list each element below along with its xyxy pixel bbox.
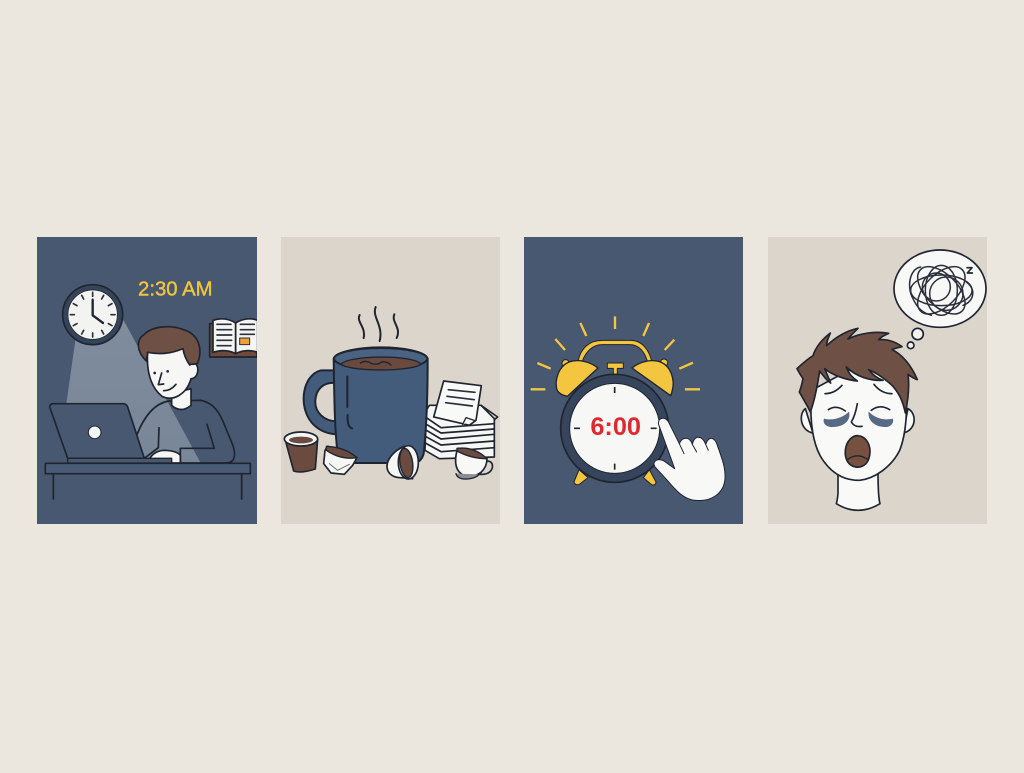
hand bbox=[150, 450, 180, 463]
panel: tired yawning face bbox=[768, 237, 987, 524]
thought bubble bbox=[894, 250, 986, 349]
tipped cup bbox=[387, 446, 418, 479]
body bbox=[561, 374, 669, 482]
panel background navy bbox=[37, 237, 257, 524]
paper cup bbox=[284, 432, 318, 472]
nose bbox=[851, 404, 862, 427]
alarm rays bbox=[531, 316, 700, 389]
face bbox=[147, 349, 198, 398]
facial features bbox=[158, 373, 176, 391]
feet bbox=[574, 470, 656, 485]
panel: late night work bbox=[37, 237, 258, 524]
pointing hand bbox=[654, 418, 725, 501]
wall clock bbox=[63, 285, 123, 345]
bells bbox=[562, 360, 569, 367]
time label: 2:30 AM bbox=[138, 279, 213, 301]
paper stack bbox=[425, 381, 498, 459]
panel: alarm clock bbox=[524, 237, 743, 524]
panel: too much coffee bbox=[281, 237, 500, 524]
yawning mouth bbox=[845, 436, 870, 467]
eye bags bbox=[824, 412, 849, 427]
scribble tangle bbox=[909, 258, 973, 322]
steam bbox=[359, 307, 398, 341]
face bbox=[811, 364, 907, 480]
crushed cup bbox=[324, 446, 357, 474]
panel background navy bbox=[524, 237, 743, 524]
alarm time: 6:00 bbox=[590, 413, 641, 441]
laptop bbox=[50, 404, 172, 463]
panel background beige bbox=[281, 237, 500, 524]
desk bbox=[45, 463, 250, 499]
open book bbox=[210, 319, 258, 357]
neck bbox=[172, 389, 191, 409]
hair bbox=[138, 327, 200, 365]
illustration canvas bbox=[37, 237, 987, 524]
big mug bbox=[304, 347, 428, 463]
eyelids and brows bbox=[825, 384, 892, 411]
hair bbox=[797, 328, 917, 413]
handle bbox=[578, 340, 652, 361]
sweater bbox=[136, 400, 235, 463]
light beam bbox=[66, 320, 200, 462]
top knob bbox=[607, 363, 623, 374]
alarm clock bbox=[556, 340, 673, 485]
panel background beige bbox=[768, 237, 987, 524]
person bbox=[136, 327, 235, 463]
small teacup bbox=[456, 448, 492, 479]
neck bbox=[836, 470, 880, 510]
ears bbox=[801, 409, 914, 433]
